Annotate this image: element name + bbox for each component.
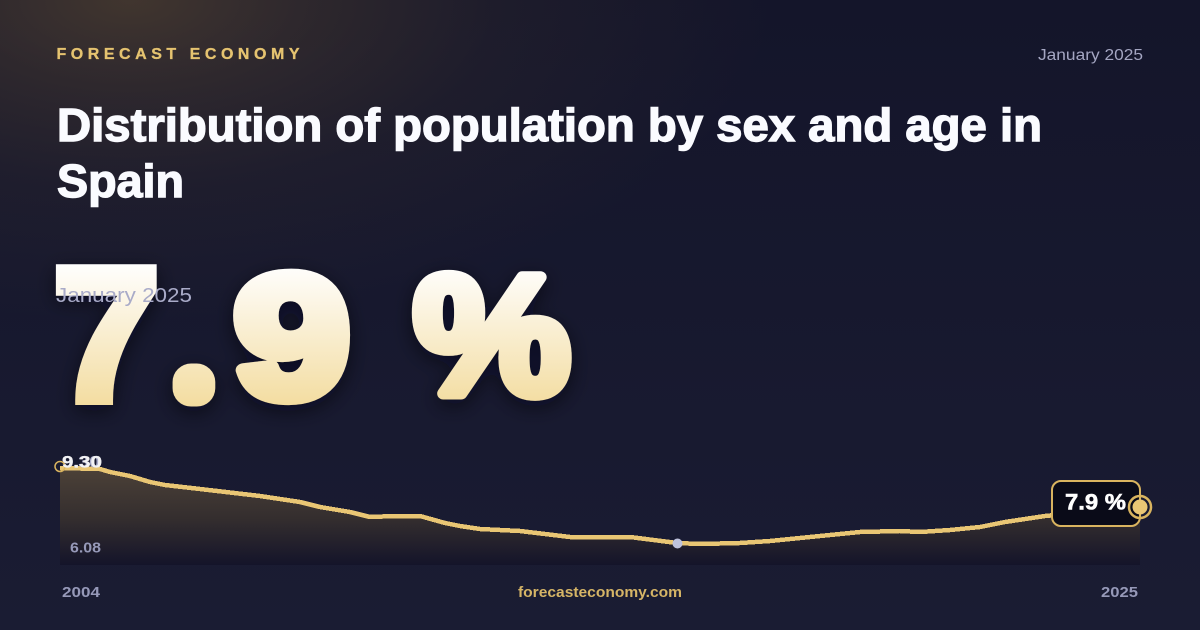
max label: 9.30 <box>62 452 100 472</box>
big value: 9 <box>234 240 349 434</box>
low point marker <box>672 538 682 548</box>
big value: . <box>188 353 200 397</box>
chart area fill <box>60 468 1140 565</box>
title: Spain <box>57 155 184 207</box>
x axis start year: 2004 <box>62 585 100 601</box>
date, top right: January 2025 <box>1038 47 1143 64</box>
title: Distribution of population by sex and age in <box>57 99 1042 151</box>
big value: % <box>414 241 570 430</box>
start marker <box>55 462 65 472</box>
area line chart <box>55 452 1151 565</box>
date overlay on big value: January 2025 <box>56 284 192 307</box>
min label: 6.08 <box>70 540 101 556</box>
current value marker <box>1129 496 1151 518</box>
max label: 9.30 <box>62 452 102 472</box>
brand label: FORECAST ECONOMY <box>56 46 300 63</box>
chart line <box>60 468 1140 544</box>
x axis end year: 2025 <box>1101 585 1138 601</box>
big value: 7 <box>53 228 160 441</box>
source url: forecasteconomy.com <box>518 585 682 601</box>
big value <box>53 228 570 441</box>
title <box>57 99 1042 207</box>
current value callout <box>1052 481 1140 526</box>
current value callout: 7.9 % <box>1065 490 1126 514</box>
